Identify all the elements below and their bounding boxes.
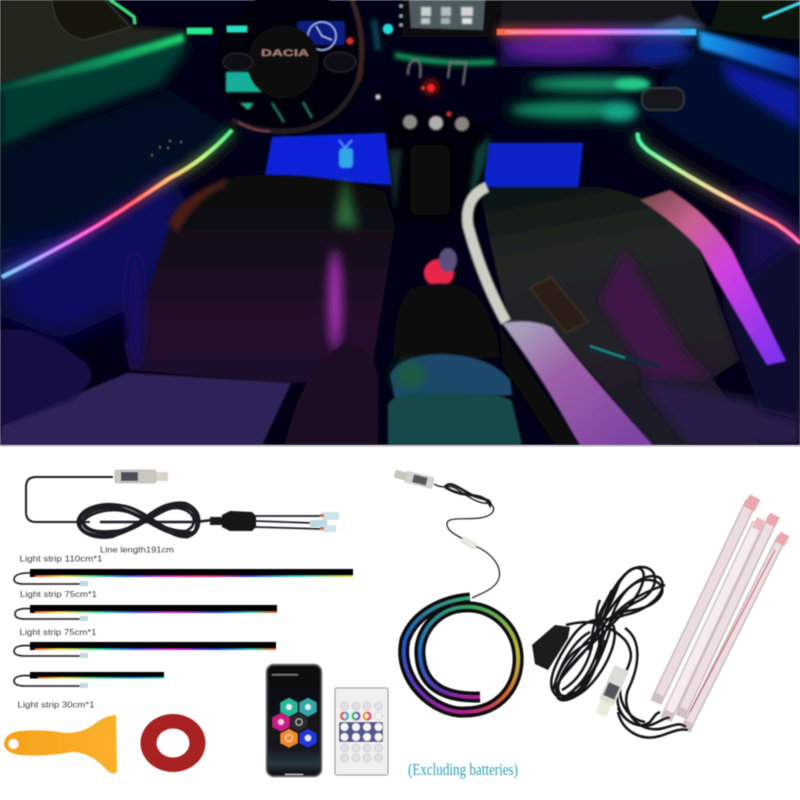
instrument cluster: [297, 21, 354, 50]
usb dongle: [115, 470, 168, 483]
magenta light stripe: [640, 190, 786, 365]
right door panel: [500, 0, 800, 340]
photo: illuminated car interior: [0, 0, 800, 445]
usb controller: [393, 468, 435, 489]
figure-eight coil: [78, 503, 212, 538]
label: strip 30cm: Light strip 30cm*1: [18, 700, 95, 710]
photo bottom edge: [0, 445, 800, 446]
end caps: [650, 692, 694, 733]
colour wheel buttons: [341, 713, 370, 719]
orange scraper: [4, 715, 117, 773]
fiber strip coil with USB controller: [393, 468, 518, 712]
center console: [376, 60, 490, 225]
excluding batteries note: (Excluding batteries): [408, 760, 518, 779]
remote control: [335, 688, 388, 775]
rainbow coil black jacket: [404, 598, 518, 712]
infotainment screen: [399, 0, 500, 37]
white seat edge: [467, 187, 506, 322]
label: line length: Line length191cm: [100, 544, 174, 554]
left door panel: [0, 0, 230, 340]
logo text: DACIA: [261, 48, 309, 59]
light strip 30cm: [14, 672, 164, 688]
hub: [247, 25, 319, 99]
light strip 75cm (first): [15, 605, 277, 621]
gear knob: [424, 248, 457, 287]
label: strip 75cm second: Light strip 75cm*1: [20, 627, 97, 637]
red adhesive ring: [140, 714, 206, 772]
black cable bundle: [551, 567, 688, 738]
OBD connector: [532, 625, 570, 670]
cable with USB dongle and figure-eight coil: [26, 470, 339, 538]
side bolster edge: [502, 321, 653, 445]
phone with app: [266, 664, 322, 777]
label: strip 110cm: Light strip 110cm*1: [20, 554, 103, 564]
right seat: [467, 187, 800, 445]
label: strip 75cm: Light strip 75cm*1: [20, 589, 97, 599]
centre armrest: [388, 283, 522, 445]
left side bolster: [0, 329, 91, 425]
thin cable: [434, 484, 499, 598]
splitter box with branches: [210, 511, 339, 532]
LED strip: dashboard: [497, 26, 696, 38]
pen on seat: [587, 345, 660, 369]
dashboard glow: [395, 36, 698, 121]
teal reflection behind wheel: [226, 72, 262, 92]
rainbow coil glowing core: [404, 598, 518, 712]
LED strip: left door: [2, 130, 232, 277]
steering wheel: [217, 0, 367, 134]
floor mats: [265, 133, 583, 192]
LED strip: right door: [638, 133, 800, 243]
LED strips: left dash and top corners: [110, 0, 800, 50]
left seat: [0, 175, 395, 445]
light strip 75cm (second): [14, 642, 276, 658]
light strip 110cm: [14, 569, 353, 586]
inner bolster: [285, 343, 378, 445]
rigid LED bars with OBD cable: [532, 497, 785, 738]
remote buttons: [340, 702, 382, 762]
door dots: [151, 140, 182, 156]
phone on seat: [530, 277, 588, 333]
seat cushion: [0, 373, 291, 445]
app hexagons: [272, 698, 316, 748]
controller dongle: [594, 665, 629, 718]
LED bars: [658, 497, 785, 725]
